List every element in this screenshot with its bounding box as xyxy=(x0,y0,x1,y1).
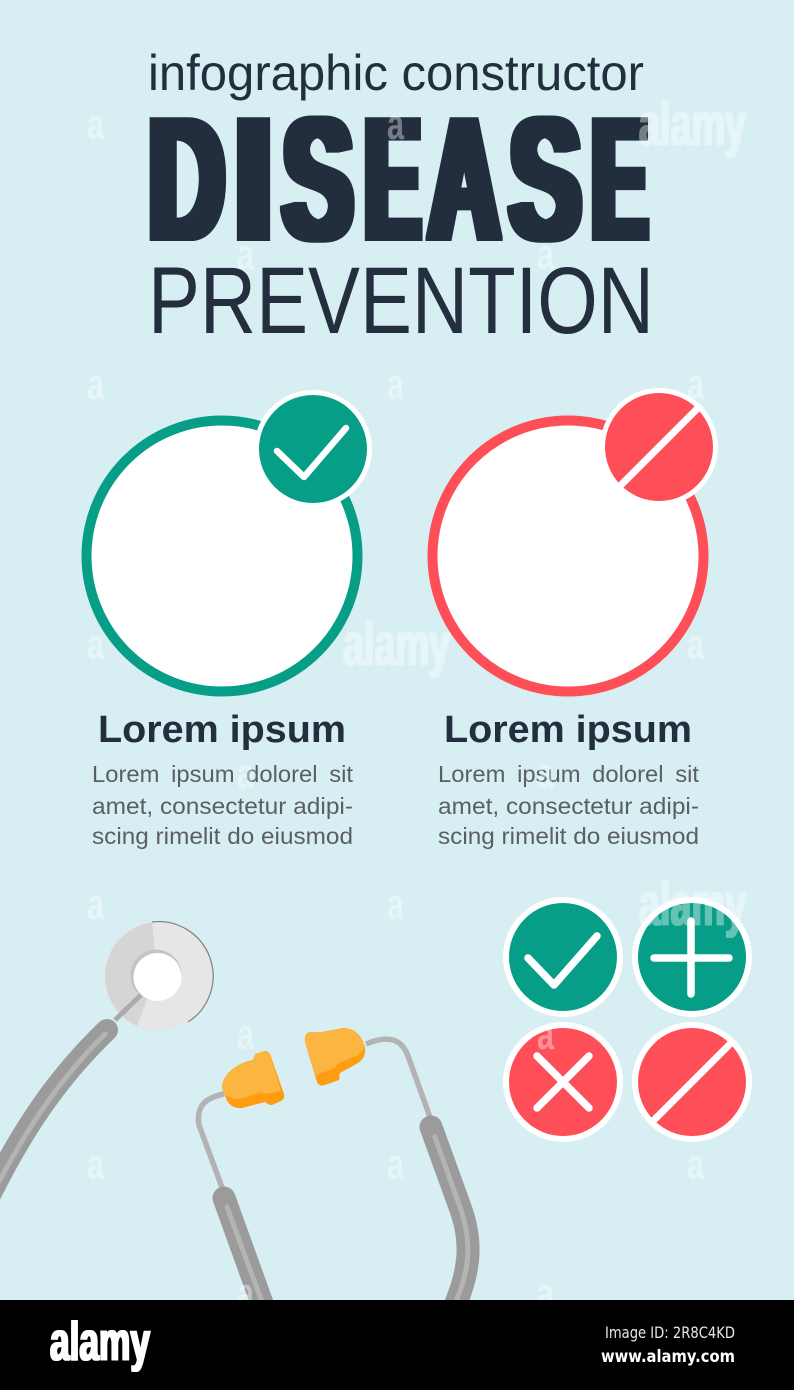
watermark: a xyxy=(237,1269,254,1318)
title line: DISEASE: A xyxy=(429,81,499,276)
title line: DISEASE: I xyxy=(233,81,274,276)
icon: slash badge xyxy=(602,390,716,504)
watermark: a xyxy=(87,100,104,149)
tube: right ear xyxy=(431,1127,468,1310)
text block: positive xyxy=(92,761,353,849)
tube: chest xyxy=(0,1030,107,1195)
watermark: a xyxy=(537,1010,554,1059)
icon: cross xyxy=(506,1025,620,1139)
watermark: a xyxy=(687,360,704,409)
title xyxy=(148,45,654,354)
text block: positive: scing rimelit do eiusmod xyxy=(92,823,353,849)
watermark: a xyxy=(87,880,104,929)
footer image id: Image ID: 2R8C4KD xyxy=(605,1323,735,1342)
watermark: a xyxy=(87,620,104,669)
icon: check badge xyxy=(256,392,370,506)
heading: negative: Lorem ipsum xyxy=(444,709,692,751)
watermark: alamy xyxy=(343,611,450,678)
watermark: a xyxy=(687,1140,704,1189)
text block: negative xyxy=(438,761,699,849)
text block: negative: scing rimelit do eiusmod xyxy=(438,823,699,849)
text block: negative: amet, consectetur adipi- xyxy=(438,793,699,819)
tube: left ear xyxy=(224,1198,263,1306)
panel: negative xyxy=(432,390,716,849)
text block: negative: Lorem ipsum dolorel sit xyxy=(438,761,699,787)
title: E xyxy=(592,81,647,276)
watermark: a xyxy=(237,1010,254,1059)
icon set xyxy=(506,900,749,1139)
panel: positive xyxy=(86,392,370,849)
watermark: a xyxy=(537,749,554,798)
title line: PREVENTION: PREVENTION xyxy=(148,248,654,354)
watermark: a xyxy=(237,749,254,798)
watermark: a xyxy=(537,230,554,279)
wire: right xyxy=(366,1039,431,1120)
title line: DISEASE: S xyxy=(283,81,353,276)
watermark xyxy=(87,91,746,1318)
text block: positive: amet, consectetur adipi- xyxy=(92,793,353,819)
watermark: a xyxy=(87,1140,104,1189)
red ring circle xyxy=(432,420,704,692)
icon: check xyxy=(506,900,620,1014)
watermark: a xyxy=(387,360,404,409)
title line: DISEASE: D xyxy=(149,81,224,276)
title line: DISEASE xyxy=(149,81,647,276)
watermark: a xyxy=(387,880,404,929)
watermark: a xyxy=(387,1140,404,1189)
wire: left xyxy=(198,1094,224,1190)
watermark: a xyxy=(687,620,704,669)
footer logo: alamy xyxy=(50,1310,150,1372)
earpiece: right xyxy=(305,1028,365,1086)
stethoscope xyxy=(0,922,468,1310)
title line: DISEASE: E xyxy=(365,81,420,276)
heading: positive: Lorem ipsum xyxy=(98,709,346,751)
watermark: a xyxy=(387,100,404,149)
icon: plus xyxy=(635,900,749,1014)
chest piece xyxy=(104,922,213,1030)
footer url: www.alamy.com xyxy=(601,1347,735,1367)
watermark: a xyxy=(87,360,104,409)
watermark: a xyxy=(237,230,254,279)
footer bar xyxy=(0,1300,794,1390)
title line: DISEASE: S xyxy=(510,81,581,276)
green ring circle xyxy=(86,420,358,692)
text block: positive: Lorem ipsum dolorel sit xyxy=(92,761,353,787)
icon: slash xyxy=(635,1025,749,1139)
watermark: a xyxy=(537,1269,554,1318)
title line: infographic constructor: infographic constructor xyxy=(148,45,644,101)
earpiece: left xyxy=(222,1051,284,1108)
